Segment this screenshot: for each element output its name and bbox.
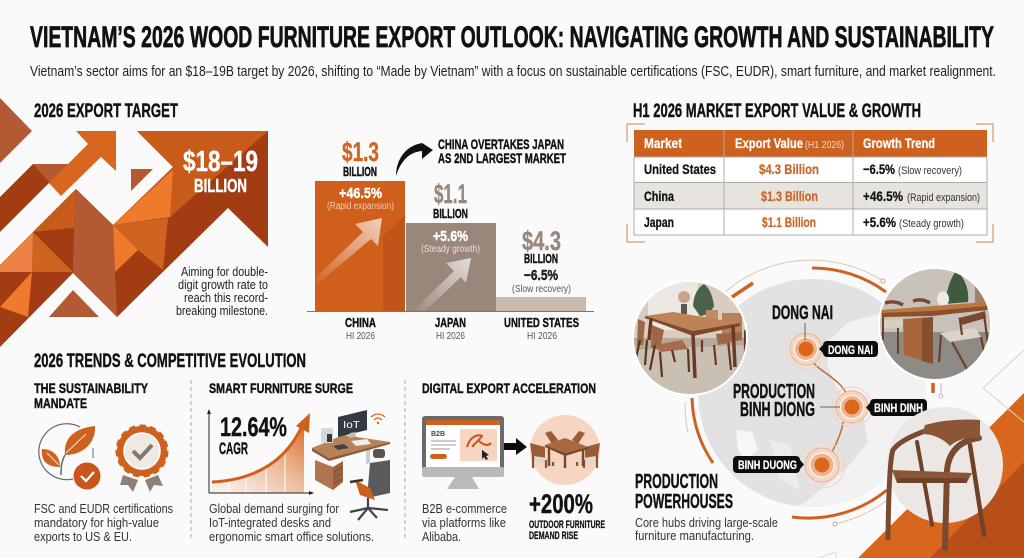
icon: leaves and check (39, 424, 100, 490)
photo: live-edge table right (878, 269, 990, 380)
pill: Binh Duong (733, 456, 804, 473)
panel: 2026 trends (34, 351, 605, 544)
heading: production powerhouses: PRODUCTION (635, 471, 718, 493)
card heading (34, 380, 149, 411)
icon: B2B monitor (422, 416, 504, 489)
bar: China (315, 137, 405, 342)
bar: United States: −6.5% (524, 267, 558, 284)
panel: production powerhouses map (630, 260, 1003, 548)
bar: China: BILLION (343, 164, 377, 179)
map label: Production Binh Diong: PRODUCTION (733, 381, 815, 403)
bar: United States: UNITED STATES (504, 315, 579, 330)
bar: China: CHINA (345, 315, 376, 330)
map label: Dong Nai (772, 303, 833, 340)
map label: Production Binh Diong: BINH DIONG (740, 399, 815, 421)
arrow: to outdoor furniture (504, 438, 527, 455)
table: China (644, 188, 674, 204)
stat label: outdoor furniture demand (529, 519, 605, 542)
stat: plus 200 percent: +200% (529, 489, 593, 519)
card heading: THE SUSTAINABILITY (34, 380, 149, 396)
map label: Production Binh Diong (733, 381, 840, 421)
card text (209, 501, 374, 544)
table (634, 130, 987, 235)
table: (Rapid expansion) (907, 192, 980, 204)
photo: wooden armchair (887, 407, 1003, 548)
bar: China: HI 2026 (346, 330, 375, 342)
table: Market (644, 135, 682, 151)
heading: trends: 2026 TRENDS & COMPETITIVE EVOLUTION (34, 351, 306, 372)
marker: Binh Dinh (832, 387, 872, 427)
table: (Steady growth) (899, 218, 964, 230)
card text (34, 501, 173, 544)
bar chart: market export values (307, 136, 594, 342)
decorative corner shapes bottom right (818, 350, 1024, 558)
bar: Japan (406, 179, 496, 342)
card text: Global demand surging for (209, 501, 340, 516)
bar: Japan: JAPAN (435, 315, 466, 330)
card: digital export acceleration (422, 380, 605, 544)
graphic: geometric rising arrows (0, 98, 268, 347)
card: smart furniture surge (207, 380, 390, 544)
panel: H1 2026 market table (627, 101, 993, 242)
pill: Binh Duong: BINH DUONG (738, 458, 797, 472)
callout: China overtakes Japan: AS 2ND LARGEST MARKET (438, 150, 566, 166)
icon: B2B monitor: B2B (431, 431, 445, 438)
card heading: SMART FURNITURE SURGE (209, 380, 353, 396)
table: (Slow recovery) (898, 165, 962, 177)
target description: digit growth rate to (178, 277, 268, 292)
bar: Japan: +5.6% (433, 228, 468, 245)
map label: Dong Nai: DONG NAI (772, 303, 833, 324)
card text: exports to US & EU. (34, 529, 132, 544)
table: −6.5% (863, 161, 895, 177)
bar: Japan: $1.1 (434, 179, 467, 209)
heading: production powerhouses: POWERHOUSES (635, 491, 733, 513)
route line (810, 358, 847, 452)
globe map (698, 279, 882, 506)
card text (422, 501, 507, 544)
bar: China: $1.3 (342, 137, 379, 167)
bar: Japan: (Steady growth) (421, 244, 480, 255)
icon: smart desk setup: IoT (343, 420, 360, 431)
table: +46.5% (863, 188, 903, 204)
icon: smart desk setup (312, 410, 390, 520)
table: Japan (644, 214, 674, 230)
marker: Dong Nai (786, 329, 826, 369)
card: sustainability mandate (34, 380, 173, 544)
decorative orbit arcs (685, 260, 943, 526)
card text: IoT-integrated desks and (209, 515, 331, 530)
bar: China: +46.5% (339, 185, 382, 202)
table: (H1 2026) (805, 139, 844, 151)
bar: Japan: HI 2026 (436, 330, 465, 342)
table corner brackets (627, 124, 993, 242)
table: United States (644, 161, 716, 177)
card text: via platforms like (422, 515, 506, 530)
heading: production powerhouses (635, 471, 733, 513)
bar: China: (Rapid expansion) (327, 201, 394, 212)
table: Growth Trend (863, 135, 935, 151)
card text: Alibaba. (422, 529, 461, 544)
line chart: CAGR growth (207, 409, 314, 495)
heading: export target: 2026 EXPORT TARGET (34, 101, 178, 122)
stat label: outdoor furniture demand: DEMAND RISE (529, 530, 578, 542)
table: $4.3 Billion (759, 161, 819, 177)
icon: certification badge (117, 426, 167, 492)
table: $1.1 Billion (762, 214, 816, 230)
card heading: DIGITAL EXPORT ACCELERATION (422, 380, 596, 396)
bar: Japan: BILLION (433, 206, 468, 221)
pill: Dong Nai (819, 341, 878, 357)
bar: United States (496, 226, 586, 342)
pill: Dong Nai: DONG NAI (828, 343, 873, 357)
target description: breaking milestone. (176, 303, 268, 318)
callout: China overtakes Japan (438, 136, 566, 166)
stat label: CAGR: CAGR (219, 439, 248, 458)
table: Export Value (735, 135, 803, 151)
table: +5.6% (863, 214, 896, 230)
panel: 2026 export target (0, 98, 268, 347)
pill: Binh Dinh: BINH DINH (874, 401, 923, 415)
stat label: outdoor furniture demand: OUTDOOR FURNITURE (529, 519, 605, 531)
bar: United States: HI 2026 (527, 330, 557, 342)
big target unit: BILLION (194, 176, 247, 196)
table: $1.3 Billion (761, 188, 818, 204)
card text: ergonomic smart office solutions. (209, 529, 374, 544)
target description: Aiming for double- (181, 264, 268, 279)
big target value: $18–19 (183, 146, 258, 178)
bar: United States: (Slow recovery) (512, 284, 571, 295)
text: core hubs (635, 515, 778, 543)
bar: United States: $4.3 (522, 226, 561, 256)
card heading: MANDATE (34, 395, 87, 411)
marker: Binh Duong (799, 442, 845, 488)
icon: outdoor furniture set (530, 415, 600, 485)
card text: B2B e-commerce (422, 501, 507, 516)
card text: FSC and EUDR certifications (34, 501, 173, 516)
callout: China overtakes Japan: CHINA OVERTAKES JAPAN (438, 136, 564, 152)
photo: dining table left (630, 280, 750, 398)
arrow: China overtakes Japan (396, 143, 433, 176)
card text: mandatory for high-value (34, 515, 159, 530)
target description: reach this record- (184, 290, 268, 305)
text: core hubs: Core hubs driving large-scale (635, 515, 778, 530)
bar: United States: BILLION (524, 251, 558, 266)
pill: Binh Dinh (866, 399, 927, 416)
stat: 12.64 percent: 12.64% (220, 412, 287, 442)
target description (176, 264, 268, 318)
text: core hubs: furniture manufacturing. (635, 528, 754, 543)
